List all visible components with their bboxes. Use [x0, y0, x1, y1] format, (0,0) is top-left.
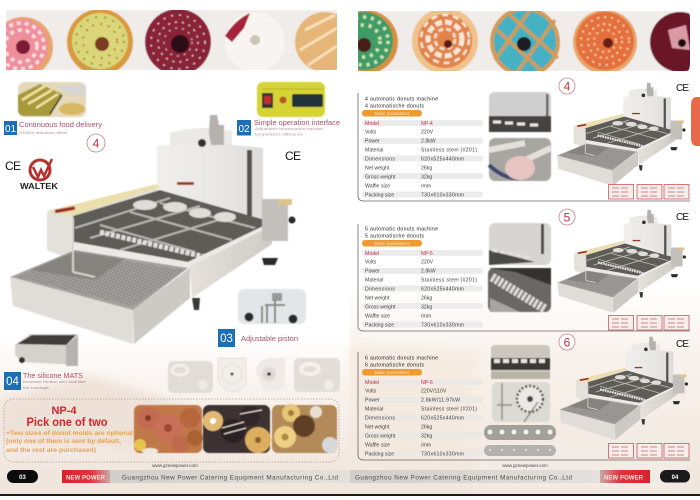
footer right: Guangzhou New Power Catering Equipment Manufacturing Co.,Ltd [355, 474, 572, 482]
note: and the rest are purchased) [6, 447, 96, 454]
panel: NP-5 spec: 220V [421, 260, 434, 266]
label 04: 04 [6, 376, 19, 388]
banner: donuts right [358, 11, 690, 71]
panel: NP-6 spec: Gross weight [365, 434, 396, 440]
panel: NP-4 spec: Dimensions [365, 156, 395, 162]
panel: NP-4 spec: Basic parameters [374, 111, 410, 116]
badge 6 [559, 334, 575, 350]
panel: NP-6 spec: Material [365, 406, 383, 412]
warning labels [608, 316, 689, 330]
panel: NP-4 spec: 32kg [421, 174, 432, 180]
panel: NP-6 spec: Model [365, 380, 379, 386]
background flag texture [0, 345, 690, 492]
note: (only one of them is sent by default, [6, 438, 121, 445]
panel: NP-6 spec: 620x525x440mm [421, 416, 464, 422]
panel: pick one of two [4, 399, 339, 462]
panel: NP-4 spec: Packing size [365, 192, 394, 198]
label 02 [237, 120, 340, 136]
panel: NP-5 spec: NP-5 [421, 251, 433, 257]
panel: NP-4 spec: 4 automatische donuts [365, 104, 424, 110]
panel: NP-4 spec: 26kg [421, 166, 432, 172]
panel: NP-6 spec: 6 automatic donuts machine [365, 356, 438, 362]
panel: NP-5 spec: Gross weight [365, 304, 396, 310]
panel: NP-4 spec: 620x525x440mm [421, 156, 464, 162]
footer right: NEW POWER [604, 476, 644, 482]
panel: NP-6 spec: 220V/110V [421, 388, 447, 394]
footer left [7, 470, 350, 483]
WALTEK logo [20, 159, 58, 191]
label 03: Adjustable piston [241, 336, 298, 343]
bottom black rule [0, 494, 700, 496]
panel: NP-5 spec: Power [365, 268, 380, 274]
panel: NP-6 spec: Waffle size [365, 442, 390, 448]
warning labels [608, 184, 689, 199]
panel: NP-6 spec: 32kg [421, 434, 432, 440]
panel: NP-5 spec: 32kg [421, 304, 432, 310]
panel: NP-6 spec: Packing size [365, 452, 394, 458]
page background left [0, 0, 350, 495]
panel: NP-5 spec [358, 224, 690, 331]
panel: NP-4 spec: 4 automatic donuts machine [365, 96, 438, 102]
panel: NP-4 spec: /mm [421, 184, 431, 190]
panel: NP-4 spec: NP-4 [421, 121, 433, 127]
label 02: 02 [238, 124, 250, 135]
panel: NP-5 spec: Packing size [365, 322, 394, 328]
panel: NP-4 spec: Volts [365, 130, 377, 136]
panel: NP-5 spec: 26kg [421, 296, 432, 302]
inset: NP-5 mold row [489, 223, 551, 265]
page background right [350, 0, 700, 495]
inset: silicone mat machine [15, 334, 78, 366]
model badge 4: 4 [93, 136, 100, 150]
inset: adjustable piston [238, 289, 306, 324]
note [6, 430, 133, 454]
inset: NP-6 mold row [491, 345, 550, 379]
CE mark: CE [676, 339, 689, 350]
panel: NP-6 spec: Dimensions [365, 416, 395, 422]
panel: NP-5 spec: Stainless steel (#201) [421, 278, 477, 284]
CE mark left: CE [5, 159, 21, 173]
footer right [350, 470, 690, 483]
inset: NP-4 mold row [489, 92, 551, 132]
panel: NP-6 spec: 6 automatische donuts [365, 362, 424, 368]
NP-4 heading: NP-4 [51, 405, 77, 417]
panel: NP-5 spec: Material [365, 278, 383, 284]
warning labels [608, 444, 689, 458]
panel: NP-5 spec: Basic parameters [374, 241, 410, 246]
panel: NP-4 spec: 2.8kW [421, 138, 436, 144]
panel: NP-5 spec: Model [365, 251, 379, 257]
panel: NP-5 spec: 5 automatische donuts [365, 234, 424, 240]
CE mark: CE [676, 212, 689, 223]
inset: NP-6 wheel [492, 382, 550, 422]
footer left: Guangzhou New Power Catering Equipment Manufacturing Co.,Ltd [122, 474, 338, 482]
panel: NP-4 spec: Stainless steel (#201) [421, 148, 477, 154]
label 01: SS304 stainless steel [19, 130, 67, 135]
footer left: NEW POWER [66, 476, 106, 482]
CE mark center: CE [285, 149, 301, 163]
panel: NP-6 spec: Basic parameters [374, 370, 410, 375]
inset: NP-5 conveyor [488, 268, 551, 312]
CE mark: CE [676, 83, 689, 94]
machine NP-4 [557, 83, 685, 186]
inset: continuous food delivery [18, 82, 86, 117]
label 04: the fuselage [23, 385, 50, 390]
panel: NP-4 spec: Material [365, 148, 383, 154]
panel: NP-6 spec [358, 352, 690, 460]
panel: NP-6 spec: 730x610x330mm [421, 452, 464, 458]
badge 5: 5 [564, 210, 571, 224]
panel: NP-6 spec: Volts [365, 388, 377, 394]
panel: NP-5 spec: Net weight [365, 296, 390, 302]
panel: NP-4 spec: 730x610x330mm [421, 192, 464, 198]
label 04: The silicone MATS [23, 373, 83, 380]
footer left: 03 [19, 475, 26, 481]
label 03 [218, 329, 298, 347]
label 02: temperature difference [255, 132, 304, 136]
main machine [10, 115, 296, 344]
banner: donuts left [6, 10, 337, 70]
panel: NP-6 spec: 2.8kW/11.97kW [421, 398, 460, 404]
label 04 [4, 372, 87, 390]
note: +Two sizes of donut molds are optional [6, 430, 133, 437]
badge 6: 6 [564, 336, 571, 350]
panel: NP-4 spec: Power [365, 138, 380, 144]
pick heading: Pick one of two [26, 417, 108, 429]
machine NP-5 [558, 210, 686, 313]
red side tab [691, 97, 700, 146]
label 02: Simple operation interface [254, 120, 340, 127]
panel: NP-5 spec: 620x525x440mm [421, 286, 464, 292]
panel: NP-5 spec: Waffle size [365, 314, 390, 320]
machine NP-6 [560, 337, 688, 440]
inset: control panel [257, 82, 325, 117]
photo: chocolate donuts [203, 405, 271, 453]
strip: small mold plate [484, 445, 556, 456]
panel: NP-4 spec: Model [365, 121, 379, 127]
panel: NP-6 spec: Stainless steel (#201) [421, 406, 477, 412]
badge 5 [559, 209, 575, 225]
panel: NP-5 spec: Volts [365, 260, 377, 266]
panel: NP-4 spec: Net weight [365, 166, 390, 172]
panel: NP-4 spec: 220V [421, 130, 434, 136]
panel: NP-4 spec [358, 93, 690, 201]
panel: NP-6 spec: /mm [421, 442, 431, 448]
panel: NP-5 spec: /mm [421, 314, 431, 320]
panel: NP-4 spec: Gross weight [365, 174, 396, 180]
label 04: Increase friction and stabilize [23, 379, 87, 384]
footer right: 04 [672, 475, 679, 481]
badge 4 right [559, 78, 575, 94]
panel: NP-6 spec: NP-6 [421, 380, 433, 386]
panel: NP-6 spec: 26kg [421, 424, 432, 430]
panel: NP-5 spec: 730x610x330mm [421, 322, 464, 328]
label 01: Continuous food delivery [19, 120, 102, 129]
panel: NP-5 spec: 5 automatic donuts machine [365, 226, 438, 232]
panel: NP-4 spec: Waffle size [365, 184, 390, 190]
panel: NP-6 spec: Power [365, 398, 380, 404]
label 02: Adjustable temperature escape [255, 126, 324, 131]
WALTEK logo: WALTEK [20, 182, 58, 191]
panel: NP-5 spec: Dimensions [365, 286, 395, 292]
inset: NP-4 hose [489, 138, 551, 181]
label 01: 01 [5, 124, 16, 135]
website right: www.gznewpower.com [502, 463, 548, 468]
model badge 4 [87, 134, 105, 152]
label 01 [4, 120, 102, 135]
panel: NP-5 spec: 2.8kW [421, 268, 436, 274]
label 03: 03 [220, 333, 233, 345]
photo: sugar donuts [272, 404, 338, 453]
strip: large mold plate [484, 425, 556, 440]
website left: www.gznewpower.com [152, 463, 198, 468]
badge 4 right: 4 [564, 80, 571, 94]
photo: glazed donuts [134, 405, 203, 454]
panel: NP-6 spec: Net weight [365, 424, 390, 430]
donut molds [168, 358, 340, 393]
